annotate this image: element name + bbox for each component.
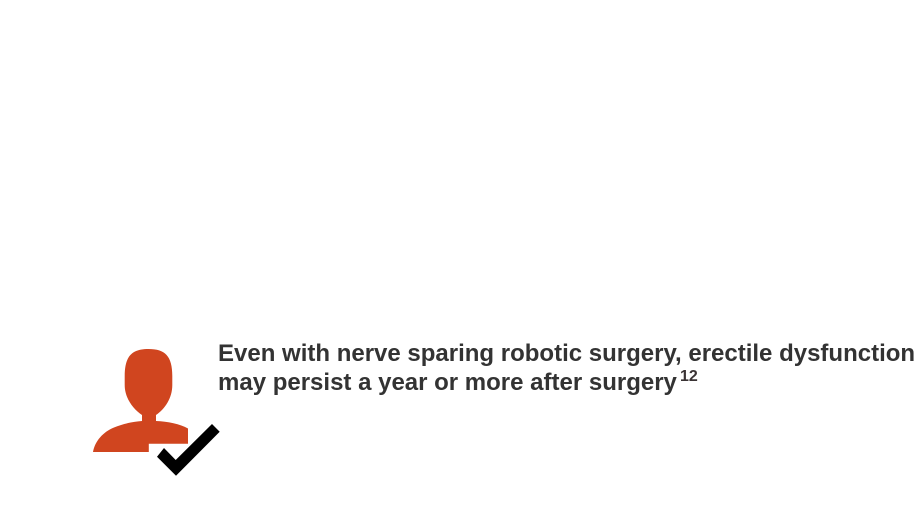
text block: erectile dysfunction statement: 12 <box>680 368 698 385</box>
text block: erectile dysfunction statement: Even with nerve sparing robotic surgery, erectile dysfunction <box>218 340 915 367</box>
text block: erectile dysfunction statement: may persist a year or more after surgery <box>218 369 677 396</box>
icon: person silhouette <box>93 349 188 452</box>
text block: erectile dysfunction statement <box>218 340 915 396</box>
icon: check mark <box>157 424 220 476</box>
